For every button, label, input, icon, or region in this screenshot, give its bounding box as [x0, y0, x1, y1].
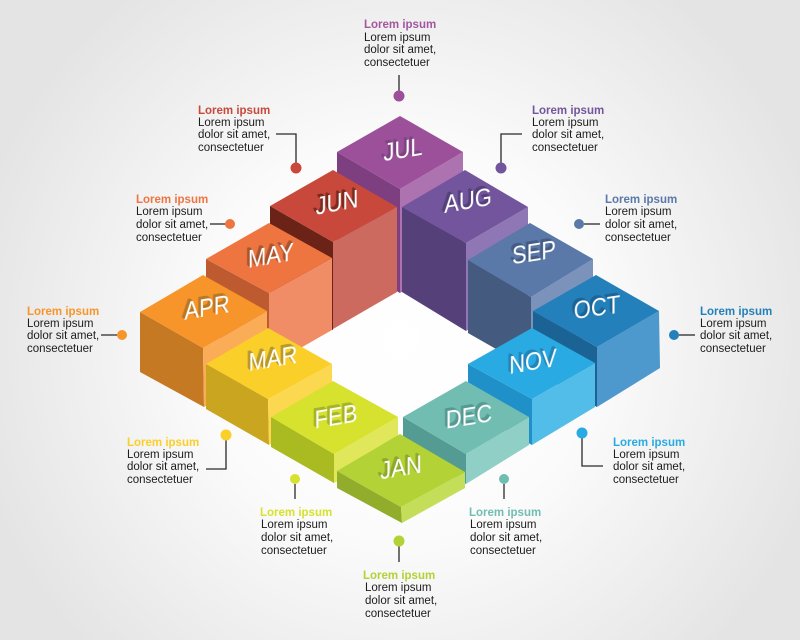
cube: JUN: JUN	[316, 186, 358, 221]
cube: JUL	[337, 116, 463, 293]
cube: NOV: NOV	[509, 345, 557, 380]
callout: AUG: consectetuer	[532, 142, 598, 154]
callout: JUN: dolor sit amet,	[198, 129, 270, 141]
cube: APR: APR	[184, 291, 230, 326]
cube: SEP: SEP	[512, 236, 556, 271]
cube: OCT	[533, 275, 660, 407]
cube: JAN: JAN	[380, 451, 422, 486]
callout: JUL	[364, 19, 436, 102]
callout: JAN: Lorem ipsum	[363, 570, 435, 582]
callout: APR: Lorem ipsum	[27, 306, 99, 318]
callout: MAY: Lorem ipsum	[136, 206, 202, 218]
callout: SEP: dolor sit amet,	[605, 219, 677, 231]
callout: SEP	[574, 194, 677, 244]
callout: MAY: consectetuer	[136, 232, 202, 244]
cube: DEC	[403, 381, 529, 484]
callout: JUL: Lorem ipsum	[364, 32, 430, 44]
callout: JUN: consectetuer	[198, 142, 264, 154]
callout: JAN: Lorem ipsum	[365, 582, 431, 594]
callout: JAN: dolor sit amet,	[365, 595, 437, 607]
callout: JAN: consectetuer	[365, 608, 431, 620]
cube: FEB: FEB	[315, 400, 357, 435]
cube: JAN	[337, 434, 465, 523]
cube: AUG	[402, 170, 528, 331]
callout: AUG: Lorem ipsum	[532, 117, 598, 129]
callout: JAN	[363, 536, 437, 620]
callout: DEC: Lorem ipsum	[469, 507, 541, 519]
cube: JUN	[270, 170, 397, 330]
callout: FEB: Lorem ipsum	[261, 519, 327, 531]
callout: APR: Lorem ipsum	[27, 318, 93, 330]
callout: OCT: consectetuer	[700, 343, 766, 355]
callout: MAY: dolor sit amet,	[136, 219, 208, 231]
callout: NOV: consectetuer	[613, 474, 679, 486]
callout: JUL: Lorem ipsum	[364, 19, 436, 31]
callout: OCT: Lorem ipsum	[700, 306, 772, 318]
callout: SEP: Lorem ipsum	[605, 194, 677, 206]
callout: MAR: Lorem ipsum	[127, 437, 199, 449]
callout: MAR: consectetuer	[127, 474, 193, 486]
callout: FEB: dolor sit amet,	[261, 532, 333, 544]
cube: SEP	[468, 223, 593, 369]
callout: MAY	[136, 194, 235, 244]
callout: JUN: Lorem ipsum	[198, 105, 270, 117]
cube: AUG: AUG	[444, 184, 492, 219]
callout: DEC: dolor sit amet,	[470, 532, 542, 544]
callout: JUL: dolor sit amet,	[364, 44, 436, 56]
cube: APR	[140, 275, 267, 407]
cube: MAY	[206, 223, 332, 366]
callout: AUG	[496, 105, 604, 174]
callout: NOV	[576, 428, 685, 486]
callout: NOV: Lorem ipsum	[613, 437, 685, 449]
callout: AUG: Lorem ipsum	[532, 105, 604, 117]
cube: NOV	[468, 328, 595, 445]
cube: MAY: MAY	[248, 239, 294, 274]
cube: MAR: MAR	[249, 342, 297, 377]
callout: FEB: Lorem ipsum	[260, 507, 332, 519]
callout: SEP: Lorem ipsum	[605, 206, 671, 218]
callout: MAR: dolor sit amet,	[127, 461, 199, 473]
callout: MAR: Lorem ipsum	[127, 449, 193, 461]
cube: JUL: JUL	[383, 134, 423, 168]
callout: OCT: Lorem ipsum	[700, 318, 766, 330]
callout: MAY: Lorem ipsum	[136, 194, 208, 206]
cube: FEB	[271, 381, 398, 483]
cube: OCT: OCT	[574, 291, 620, 326]
callout: OCT: dolor sit amet,	[700, 330, 772, 342]
callout: DEC: Lorem ipsum	[470, 519, 536, 531]
cube: MAR	[206, 328, 332, 445]
callout: MAR	[127, 430, 232, 486]
callout: JUN	[198, 105, 302, 174]
callout: APR: consectetuer	[27, 343, 93, 355]
callout: JUL: consectetuer	[364, 57, 430, 69]
callout: SEP: consectetuer	[605, 232, 671, 244]
callout: DEC	[469, 474, 542, 557]
callout: NOV: dolor sit amet,	[613, 461, 685, 473]
callout: FEB	[260, 474, 333, 557]
cube: DEC: DEC	[446, 400, 492, 435]
callout: AUG: dolor sit amet,	[532, 129, 604, 141]
callout: JUN: Lorem ipsum	[198, 117, 264, 129]
callout: NOV: Lorem ipsum	[613, 449, 679, 461]
callout: APR	[27, 306, 127, 355]
callout: APR: dolor sit amet,	[27, 330, 99, 342]
callout: OCT	[669, 306, 772, 355]
callout: FEB: consectetuer	[261, 545, 327, 557]
callout: DEC: consectetuer	[470, 545, 536, 557]
